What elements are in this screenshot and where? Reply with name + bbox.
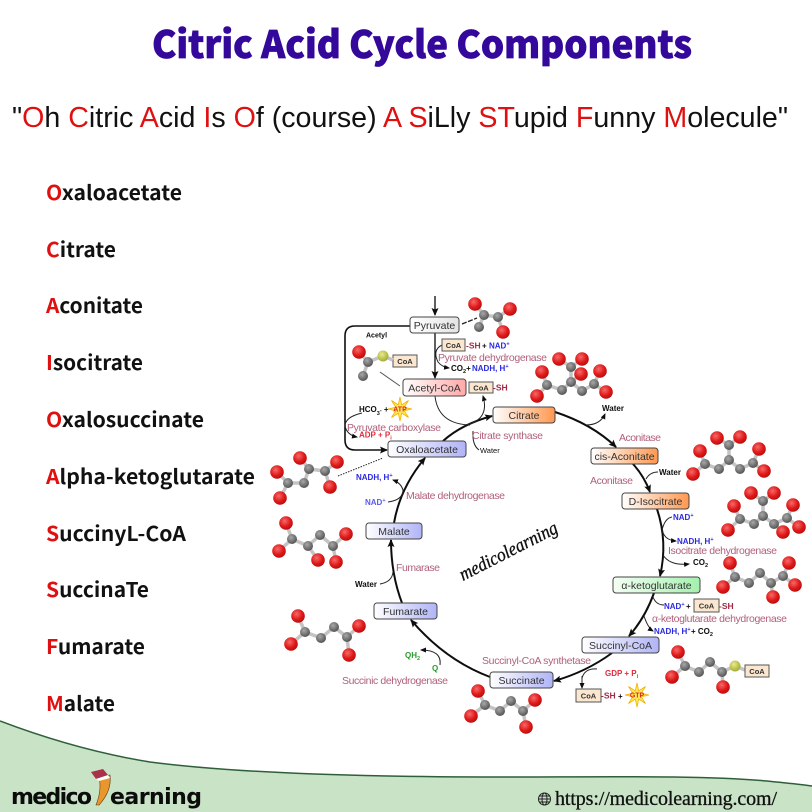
enzyme labels: Aconitase [590, 475, 633, 487]
enzyme labels: Malate dehydrogenase [406, 490, 505, 502]
icon: ATP burst [388, 397, 412, 421]
molecule: citrate [530, 352, 613, 403]
cofactor labels: right side: + [618, 692, 623, 701]
logo: medicolearning [11, 769, 202, 810]
list of cycle components: Oxaloacetate [46, 176, 182, 206]
node: alpha-ketoglutarate [613, 577, 700, 593]
side reaction arrows [338, 318, 689, 688]
cofactor labels: right side: CO [693, 558, 705, 567]
node: D-Isocitrate [622, 493, 689, 509]
enzyme labels: Pyruvate carboxylase [347, 422, 441, 434]
cofactor labels: left side: NADH, H [356, 473, 389, 482]
icon: GTP burst: GTP [630, 692, 645, 700]
cofactor labels: pyruvate steps: CoA [397, 357, 413, 366]
enzyme labels: Pyruvate dehydrogenase [438, 352, 547, 364]
cofactor labels: pyruvate steps: + [466, 364, 471, 373]
enzyme labels: Succinic dehydrogenase [342, 675, 448, 687]
logo: medicolearning: medico [11, 785, 92, 810]
cofactor labels: pyruvate steps: NADH, H [472, 364, 505, 373]
molecule: pyruvate [468, 297, 517, 339]
molecule: malate [272, 516, 353, 569]
icon: GTP burst [625, 683, 649, 707]
node: Succinate [490, 672, 553, 688]
cofactor labels: pyruvate steps: i [390, 436, 392, 442]
list of cycle components: Citrate [46, 233, 116, 263]
cofactor labels: pyruvate steps: HCO [359, 405, 377, 414]
enzyme labels: Citrate synthase [472, 430, 543, 442]
cofactor labels: pyruvate steps: + [384, 405, 389, 414]
cofactor labels: right side: CoA [699, 602, 715, 610]
icon: ATP burst: ATP [393, 406, 407, 414]
cofactor labels: pyruvate steps: CO [451, 364, 463, 373]
cofactor labels: left side: + [382, 498, 386, 504]
enzyme labels: α-ketoglutarate dehydrogenase [652, 613, 787, 625]
cofactor labels: right side: NADH, H [677, 537, 710, 546]
molecule: oxaloacetate [270, 451, 344, 505]
node: Succinyl-CoA: Succinyl-CoA [589, 640, 652, 652]
cofactor labels: left side [355, 473, 438, 673]
node: Oxaloacetate: Oxaloacetate [396, 444, 458, 456]
cofactor labels: right side: + CO [691, 627, 710, 636]
node: Malate [366, 523, 422, 539]
cofactor labels: pyruvate steps: Acetyl [366, 332, 387, 340]
cofactor labels: pyruvate steps: 2 [463, 369, 466, 375]
cofactor labels: pyruvate steps: -SH [466, 340, 481, 350]
molecule: alpha-ketoglutarate [716, 556, 802, 604]
node: Acetyl-CoA: Acetyl-CoA [408, 382, 461, 394]
cofactor labels: right side: + [690, 513, 694, 519]
cofactor labels: right side: CoA [581, 692, 597, 700]
cofactor labels: left side: + [389, 473, 393, 479]
cofactor labels: pyruvate steps: CoA [473, 384, 489, 392]
cofactor labels: right side: + [686, 602, 691, 611]
enzyme labels: Fumarase [396, 562, 440, 574]
cofactor labels: right side: Water [659, 468, 681, 477]
footer band [0, 721, 812, 812]
list of cycle components: Malate [46, 687, 115, 717]
cofactor labels: left side: NAD [365, 498, 382, 507]
cofactor labels: right side: -SH [601, 690, 616, 700]
molecule: succinyl-CoA: CoA [749, 667, 765, 676]
cofactor labels: right side: i [637, 674, 639, 680]
cofactor labels: left side: Q [432, 664, 438, 673]
enzyme labels: Aconitase [619, 432, 661, 444]
cofactor labels: right side: NAD [664, 602, 681, 611]
list of cycle components: SuccinyL-CoA [46, 517, 187, 547]
icon: pencil mascot [91, 769, 110, 805]
molecule: acetyl group [352, 345, 393, 381]
icon: globe [538, 793, 550, 805]
cofactor labels: right side: NADH, H [654, 627, 687, 636]
list of cycle components: Fumarate [46, 630, 145, 660]
cofactor labels: right side: -SH [719, 601, 734, 611]
cofactor labels: right side: 2 [710, 632, 713, 638]
main cycle arrows [345, 296, 663, 681]
node: Malate: Malate [378, 526, 410, 538]
enzyme labels: Isocitrate dehydrogenase [668, 545, 777, 557]
cofactor labels: right side: 2 [705, 563, 708, 569]
node: Succinyl-CoA [582, 637, 659, 653]
node: alpha-ketoglutarate: α-ketoglutarate [621, 580, 692, 592]
node: Oxaloacetate [388, 441, 466, 457]
cofactor labels: pyruvate steps: + [506, 342, 510, 348]
cofactor labels: right side: + [687, 627, 691, 633]
logo: medicolearning: earning [110, 785, 202, 810]
cofactor labels: right side: + [710, 537, 714, 543]
cofactor labels: pyruvate steps: 3 [377, 411, 380, 417]
cofactor labels: pyruvate steps: CoA [446, 341, 462, 350]
list of cycle components: SuccinaTe [46, 573, 149, 603]
cofactor labels: pyruvate steps: - [380, 408, 382, 414]
node: Fumarate: Fumarate [383, 606, 428, 618]
node: Pyruvate: Pyruvate [414, 320, 455, 332]
cofactor labels: left side: 2 [417, 656, 420, 662]
mnemonic sentence: "Oh Citric Acid Is Of (course) A SiLly STupid Funny Molecule" [12, 102, 788, 134]
cofactor labels: pyruvate steps [359, 332, 510, 455]
node: Citrate: Citrate [509, 410, 540, 422]
node: Fumarate [374, 603, 437, 619]
cofactor labels: right side: Water [602, 404, 624, 413]
citric acid cycle diagram [270, 296, 806, 734]
list of cycle components: Isocitrate [46, 346, 143, 376]
molecule: cis-aconitate [686, 430, 771, 481]
cofactor labels: right side [576, 404, 734, 702]
cofactor labels: right side: GDP + P [605, 669, 637, 678]
cofactor labels: pyruvate steps: + [505, 364, 509, 370]
molecule: succinate [464, 684, 542, 734]
list of cycle components: Alpha-ketoglutarate [45, 460, 255, 490]
node: Citrate [493, 407, 555, 423]
cofactor labels: pyruvate steps: + [482, 342, 487, 350]
cofactor labels: left side: QH [405, 651, 417, 660]
enzyme labels [342, 352, 787, 687]
enzyme labels: Succinyl-CoA synthetase [482, 655, 591, 667]
molecule: D-isocitrate [721, 486, 806, 539]
title: Citric Acid Cycle Components [152, 14, 692, 69]
node: Acetyl-CoA [403, 379, 466, 396]
node: cis-Aconitate: cis-Aconitate [594, 451, 655, 463]
node: D-Isocitrate: D-Isocitrate [629, 496, 682, 508]
molecule: succinyl-CoA [665, 645, 769, 694]
cofactor labels: right side: + [681, 602, 685, 608]
cofactor labels: right side: NAD [673, 513, 690, 522]
cofactor labels: pyruvate steps: NAD [489, 342, 506, 350]
node: Pyruvate [410, 317, 459, 333]
cofactor labels: pyruvate steps: Water [480, 446, 500, 455]
website URL: https://medicolearning.com/ [555, 788, 777, 810]
node: cis-Aconitate [591, 448, 658, 464]
list of cycle components: Oxalosuccinate [46, 403, 204, 433]
node: Succinate: Succinate [498, 675, 545, 687]
cofactor labels: pyruvate steps: -SH [493, 382, 508, 392]
molecule: fumarate [284, 609, 366, 662]
cofactor labels: left side: Water [355, 580, 377, 589]
list of cycle components: Aconitate [45, 289, 143, 319]
cofactor labels: pyruvate steps: ADP + P [359, 430, 390, 440]
handwritten watermark: medicolearning [456, 518, 561, 585]
list of cycle components [45, 176, 255, 717]
